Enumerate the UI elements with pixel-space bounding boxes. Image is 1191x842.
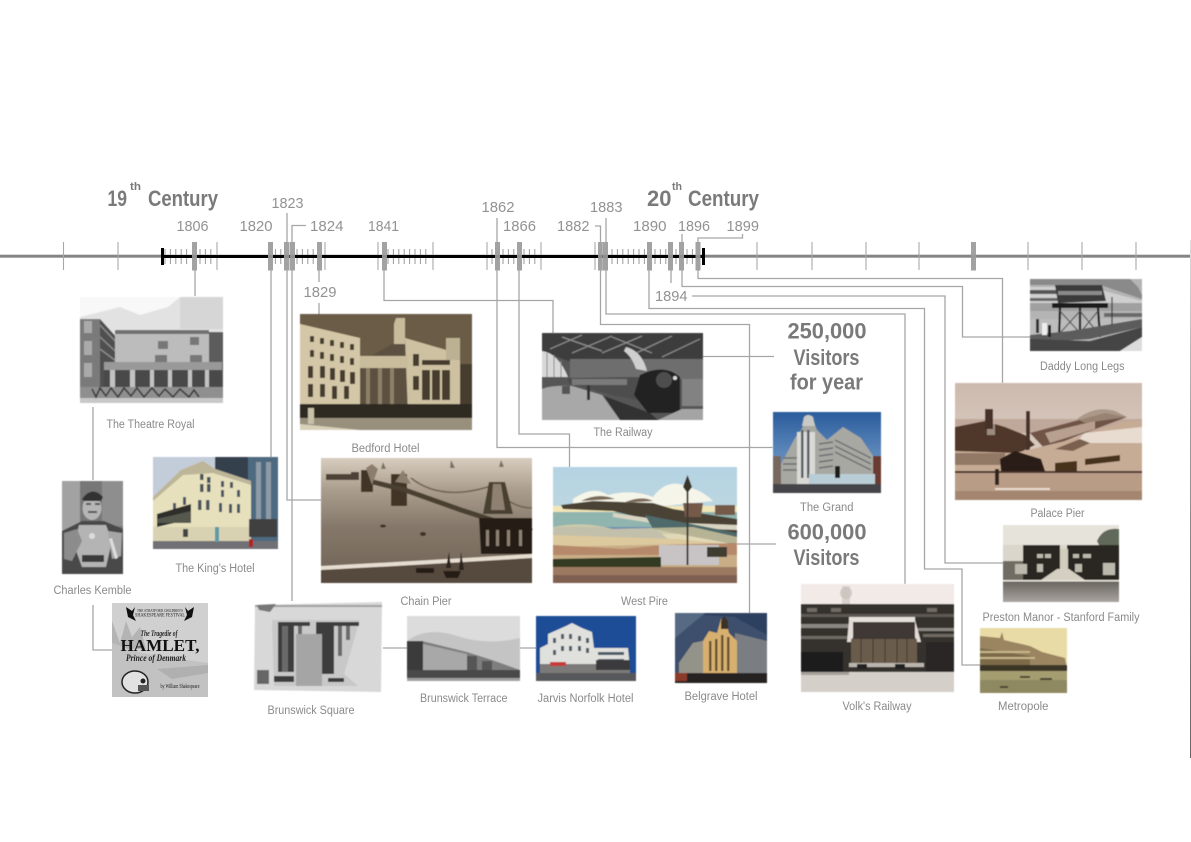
event markers xyxy=(192,242,976,270)
photo: Hamlet poster: SHAKESPEARE FESTIVAL xyxy=(135,614,185,618)
caption: Charles Kemble: Charles Kemble xyxy=(54,585,132,597)
timeline axis xyxy=(0,242,1191,270)
caption: Metropole: Metropole xyxy=(998,701,1048,713)
callout: 600,000 visitors: Visitors xyxy=(794,545,860,570)
photo: Bedford Hotel xyxy=(299,313,473,431)
caption: Palace Pier: Palace Pier xyxy=(1030,508,1085,520)
photo: West Pire xyxy=(552,466,738,584)
yearly ticks xyxy=(165,249,692,264)
photo: Brunswick Square plan xyxy=(254,602,382,692)
photo: The King's Hotel xyxy=(152,456,279,550)
heading: 19th century: Century xyxy=(148,186,219,211)
caption: Preston Manor - Stanford Family: Preston Manor - Stanford Family xyxy=(982,612,1140,624)
callout: 250,000 visitors for year: for year xyxy=(790,370,863,394)
year labels: 1894 xyxy=(655,288,688,305)
connector lines xyxy=(93,213,1030,665)
caption: Volk's Railway: Volk's Railway xyxy=(842,701,912,713)
callout: 250,000 visitors for year xyxy=(788,318,866,394)
year labels: 1896 xyxy=(678,218,710,235)
photo: The Grand xyxy=(772,411,882,494)
year labels: 1824 xyxy=(310,218,344,235)
heading: 19th century: th xyxy=(130,181,141,193)
caption: The Grand: The Grand xyxy=(800,502,854,514)
photo: The Railway xyxy=(541,332,704,421)
year labels: 1823 xyxy=(272,195,304,212)
caption: The King's Hotel: The King's Hotel xyxy=(176,563,254,575)
black 19th century span xyxy=(162,255,703,258)
caption: The Railway: The Railway xyxy=(594,427,653,439)
heading: 20th century: Century xyxy=(688,186,760,211)
year labels xyxy=(176,195,759,305)
photo: Brunswick Terrace xyxy=(406,616,521,682)
photo: Chain Pier xyxy=(320,458,534,584)
year labels: 1866 xyxy=(503,218,536,235)
photo: Hamlet poster: The Tragedie of xyxy=(140,629,178,638)
decade ticks xyxy=(64,242,1136,270)
caption: Belgrave Hotel: Belgrave Hotel xyxy=(684,691,758,703)
photo: Preston Manor xyxy=(1002,524,1120,602)
photo: Hamlet poster xyxy=(112,603,208,697)
year labels: 1899 xyxy=(726,218,759,235)
photo: Metropole xyxy=(979,628,1068,694)
caption: Brunswick Terrace: Brunswick Terrace xyxy=(420,693,508,705)
photo: Volk's Railway xyxy=(800,584,955,692)
photo: Daddy Long Legs xyxy=(1029,278,1143,352)
caption: Daddy Long Legs: Daddy Long Legs xyxy=(1040,361,1125,373)
callout: 250,000 visitors for year: Visitors xyxy=(794,345,860,370)
year labels: 1820 xyxy=(240,218,272,235)
right edge line xyxy=(1190,240,1191,758)
heading: 20th century: 20 xyxy=(647,186,672,211)
heading: 20th century xyxy=(647,181,760,211)
photo: Hamlet poster: THE STRATFORD CHILDREN'S xyxy=(137,608,183,613)
caption: Bedford Hotel: Bedford Hotel xyxy=(352,443,420,455)
callout: 600,000 visitors: 600,000 xyxy=(788,520,866,544)
heading: 19th century: 19 xyxy=(108,186,127,211)
callout: 250,000 visitors for year: 250,000 xyxy=(788,318,866,344)
year labels: 1862 xyxy=(482,199,514,216)
caption: West Pire: West Pire xyxy=(621,596,668,608)
photo: The Theatre Royal xyxy=(79,296,224,404)
year labels: 1829 xyxy=(304,284,336,301)
caption: Chain Pier: Chain Pier xyxy=(400,596,452,608)
caption: Jarvis Norfolk Hotel: Jarvis Norfolk Hotel xyxy=(538,693,634,705)
photo: Jarvis Norfolk Hotel xyxy=(535,615,637,682)
year labels: 1882 xyxy=(557,218,590,235)
photo: Palace Pier xyxy=(954,382,1143,501)
year labels: 1883 xyxy=(590,199,622,216)
heading: 19th century xyxy=(108,181,219,211)
photo: Belgrave Hotel xyxy=(674,612,768,684)
callout: 600,000 visitors xyxy=(788,520,866,570)
photo: Hamlet poster: Prince of Denmark xyxy=(126,653,186,663)
caption: The Theatre Royal: The Theatre Royal xyxy=(106,419,194,431)
year labels: 1841 xyxy=(368,218,399,235)
year labels: 1890 xyxy=(633,218,666,235)
photo: Charles Kemble xyxy=(61,480,124,575)
photo: Hamlet poster: HAMLET, xyxy=(120,636,200,655)
year labels: 1806 xyxy=(176,218,208,235)
caption: Brunswick Square: Brunswick Square xyxy=(268,705,354,717)
heading: 20th century: th xyxy=(672,181,682,193)
